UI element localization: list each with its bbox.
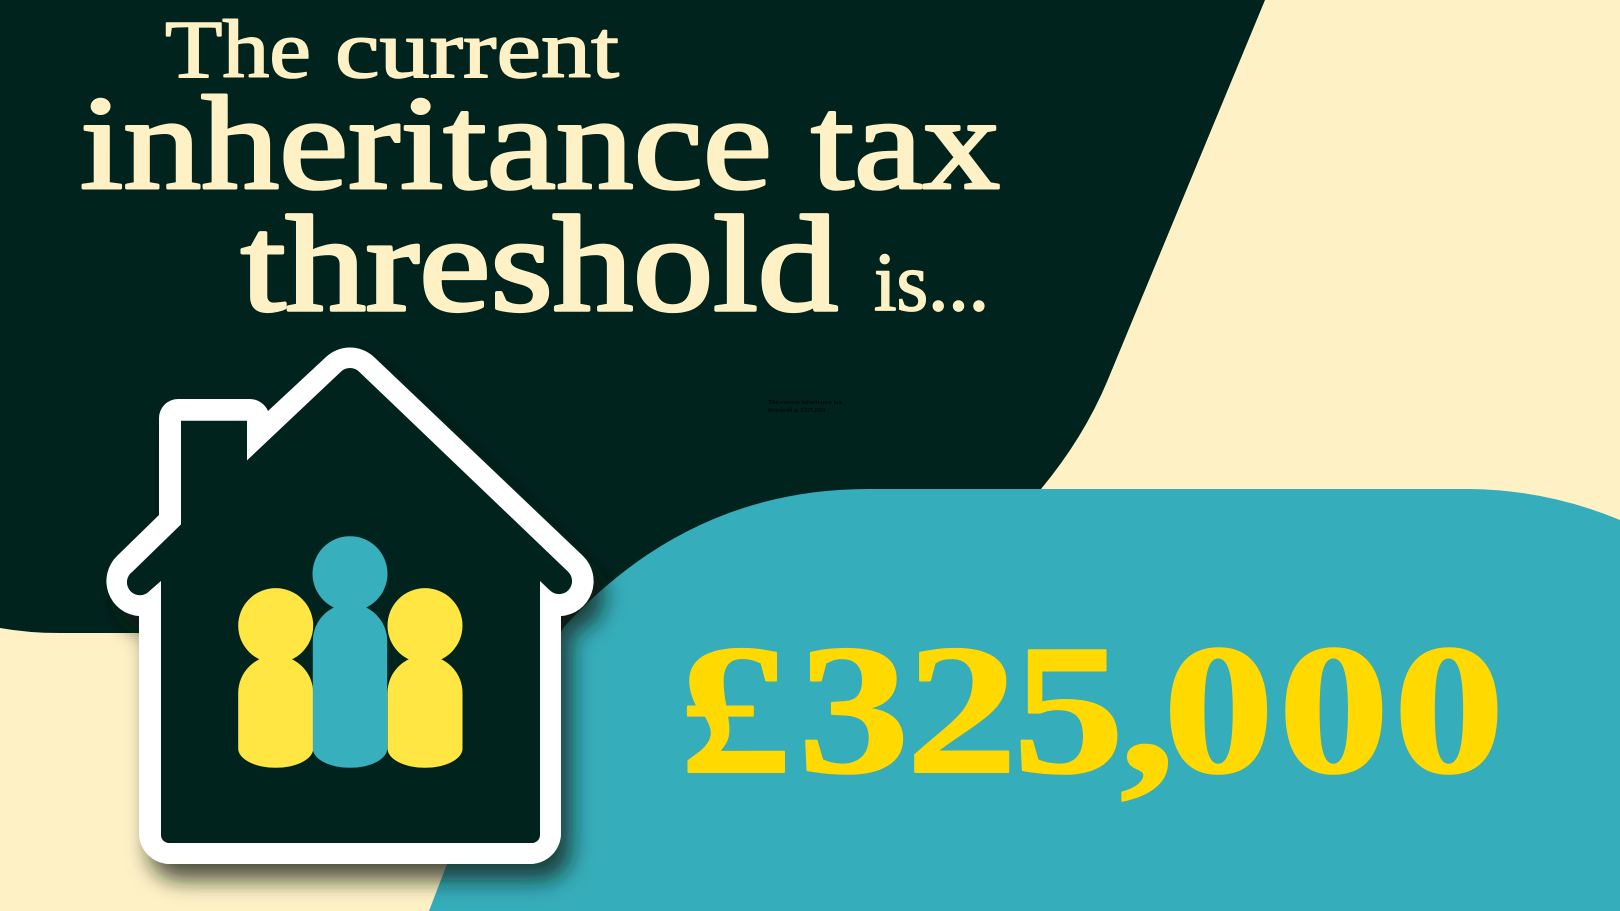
- figure: left yellow person: [238, 588, 313, 768]
- amount: £325,000: £325,000: [679, 607, 1505, 813]
- title: [80, 3, 1000, 340]
- tiny hidden caption: [768, 399, 843, 414]
- title line: threshold: threshold: [241, 188, 838, 340]
- title line: The current: current: [335, 3, 619, 95]
- tiny hidden caption: threshold is £325,000: [768, 407, 825, 414]
- figure: right yellow person: [388, 588, 462, 768]
- panel: teal shape: [429, 489, 1620, 911]
- title line: inheritance tax: [80, 69, 1000, 217]
- title line: is...: is...: [874, 236, 989, 329]
- figure: centre teal person: [312, 536, 388, 768]
- title line: The current: [165, 3, 619, 95]
- tiny hidden caption: The current inheritance tax: [768, 399, 843, 406]
- house outline: [106, 347, 594, 864]
- icon: house with family: [106, 347, 594, 864]
- house interior: [127, 368, 572, 843]
- title line: The current: The: [165, 3, 311, 95]
- panel: dark green shape: [0, 0, 1265, 640]
- title line: inheritance tax: inheritance: [80, 69, 772, 217]
- title line: inheritance tax: tax: [811, 69, 1000, 217]
